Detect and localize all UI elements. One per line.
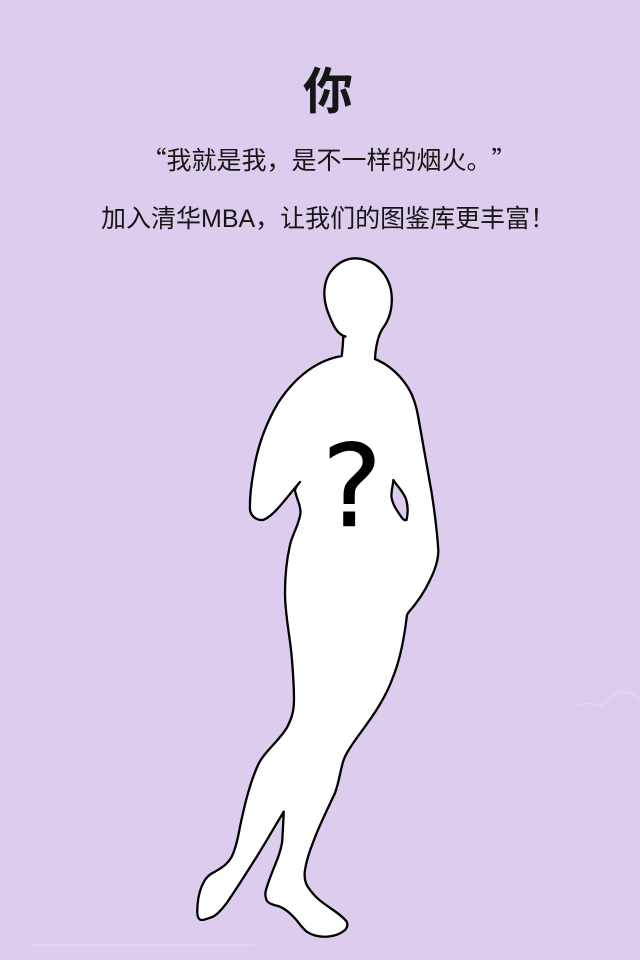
- side gap: [391, 480, 408, 520]
- body outline: [197, 258, 438, 937]
- title: 你: [303, 64, 353, 120]
- quote line: “我就是我，是不一样的烟火。”: [142, 141, 517, 177]
- decorative faint marks: [30, 692, 640, 945]
- question mark: ?: [322, 420, 382, 553]
- call to action line: 加入清华MBA，让我们的图鉴库更丰富！: [101, 205, 555, 233]
